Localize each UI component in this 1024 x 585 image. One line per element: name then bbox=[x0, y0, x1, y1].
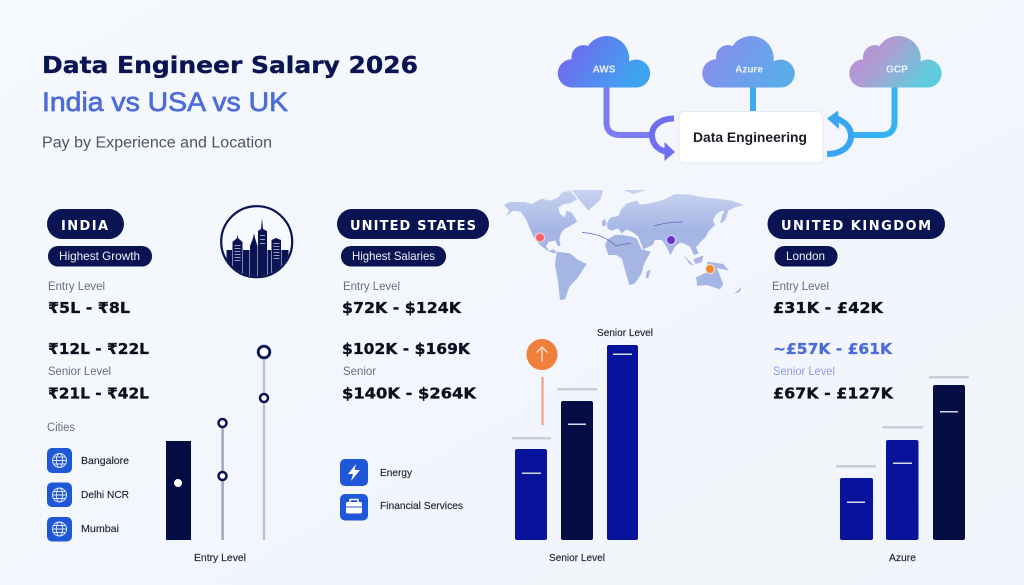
senior value: £67K - £127K bbox=[773, 384, 894, 402]
marker: orange bbox=[706, 264, 714, 274]
world map bbox=[504, 190, 744, 300]
chart: UK salary bars bbox=[836, 376, 969, 564]
arrow: AWS curve bbox=[652, 118, 675, 161]
connector: Azure bbox=[750, 87, 756, 112]
mid value: $102K - $169K bbox=[342, 340, 471, 358]
chart: US salary bars bbox=[512, 327, 653, 564]
badge: INDIA: INDIA bbox=[61, 219, 108, 234]
title: Data Engineer Salary 2026 bbox=[42, 53, 418, 79]
industry: Financial Services bbox=[340, 494, 463, 520]
badge: Highest Salaries: Highest Salaries bbox=[352, 249, 435, 263]
cloud: AWS bbox=[558, 36, 650, 88]
entry value: ₹5L - ₹8L bbox=[48, 299, 130, 317]
industry: Financial Services: Financial Services bbox=[380, 500, 463, 512]
senior label: Senior Level bbox=[773, 364, 835, 378]
senior label: Senior Level bbox=[48, 364, 111, 378]
chart: US salary bars: Senior Level bbox=[549, 552, 605, 564]
senior value: ₹21L - ₹42L bbox=[48, 384, 149, 402]
title block bbox=[42, 53, 418, 152]
senior label: Senior bbox=[343, 364, 376, 378]
entry label: Entry Level bbox=[48, 279, 105, 293]
mid value: ~£57K - £61K bbox=[773, 340, 893, 358]
industry: Energy: Energy bbox=[380, 467, 413, 479]
chart: India levels bbox=[166, 346, 270, 564]
panel: United Kingdom bbox=[768, 209, 969, 564]
cloud: GCP bbox=[849, 36, 942, 88]
box: Data Engineering: Data Engineering bbox=[693, 129, 807, 145]
badge: Highest Growth bbox=[48, 246, 152, 266]
panel: United States bbox=[337, 209, 653, 564]
badge: London bbox=[774, 246, 838, 266]
cities heading: Cities bbox=[47, 422, 75, 434]
badge: Highest Salaries bbox=[341, 246, 446, 266]
tagline: Pay by Experience and Location bbox=[42, 134, 272, 152]
cloud: AWS: AWS bbox=[593, 64, 616, 76]
city: Delhi NCR bbox=[47, 482, 129, 507]
box: Data Engineering bbox=[679, 112, 823, 163]
badge: London: London bbox=[786, 249, 825, 263]
mid value: ₹12L - ₹22L bbox=[48, 340, 149, 358]
industry: Energy bbox=[340, 459, 413, 486]
connector: AWS bbox=[606, 87, 651, 135]
badge: INDIA bbox=[47, 209, 124, 239]
badge: UNITED STATES: UNITED STATES bbox=[350, 219, 476, 234]
chart: US salary bars: Senior Level bbox=[597, 327, 653, 339]
entry value: £31K - £42K bbox=[773, 299, 884, 317]
land masses bbox=[504, 190, 744, 300]
city: Mumbai: Mumbai bbox=[81, 523, 119, 535]
subtitle: India vs USA vs UK bbox=[42, 87, 288, 117]
senior value: $140K - $264K bbox=[342, 384, 477, 402]
panel: India bbox=[47, 206, 292, 564]
cloud: Azure: Azure bbox=[735, 64, 763, 76]
city: Mumbai bbox=[47, 517, 119, 542]
badge: Highest Growth: Highest Growth bbox=[59, 249, 140, 263]
entry label: Entry Level bbox=[343, 279, 400, 293]
connector: GCP bbox=[851, 87, 894, 135]
entry value: $72K - $124K bbox=[342, 299, 462, 317]
cloud diagram bbox=[558, 36, 942, 163]
icon: orange up arrow bbox=[526, 339, 558, 425]
icon: city skyline bbox=[221, 206, 292, 280]
city: Delhi NCR: Delhi NCR bbox=[81, 489, 129, 501]
city: Bangalore bbox=[47, 448, 129, 473]
route arcs bbox=[582, 222, 683, 246]
badge: UNITED KINGDOM bbox=[768, 209, 945, 239]
entry label: Entry Level bbox=[772, 279, 829, 293]
badge: UNITED KINGDOM: UNITED KINGDOM bbox=[781, 219, 931, 234]
chart: India levels: Entry Level bbox=[194, 552, 246, 564]
city: Bangalore: Bangalore bbox=[81, 455, 129, 467]
cloud: GCP: GCP bbox=[886, 64, 908, 76]
marker: red bbox=[536, 233, 544, 242]
chart: UK salary bars: Azure bbox=[889, 552, 916, 564]
cloud: Azure bbox=[702, 36, 795, 88]
marker: purple bbox=[666, 236, 676, 244]
badge: UNITED STATES bbox=[337, 209, 489, 239]
arrow: GCP curve bbox=[827, 110, 851, 154]
